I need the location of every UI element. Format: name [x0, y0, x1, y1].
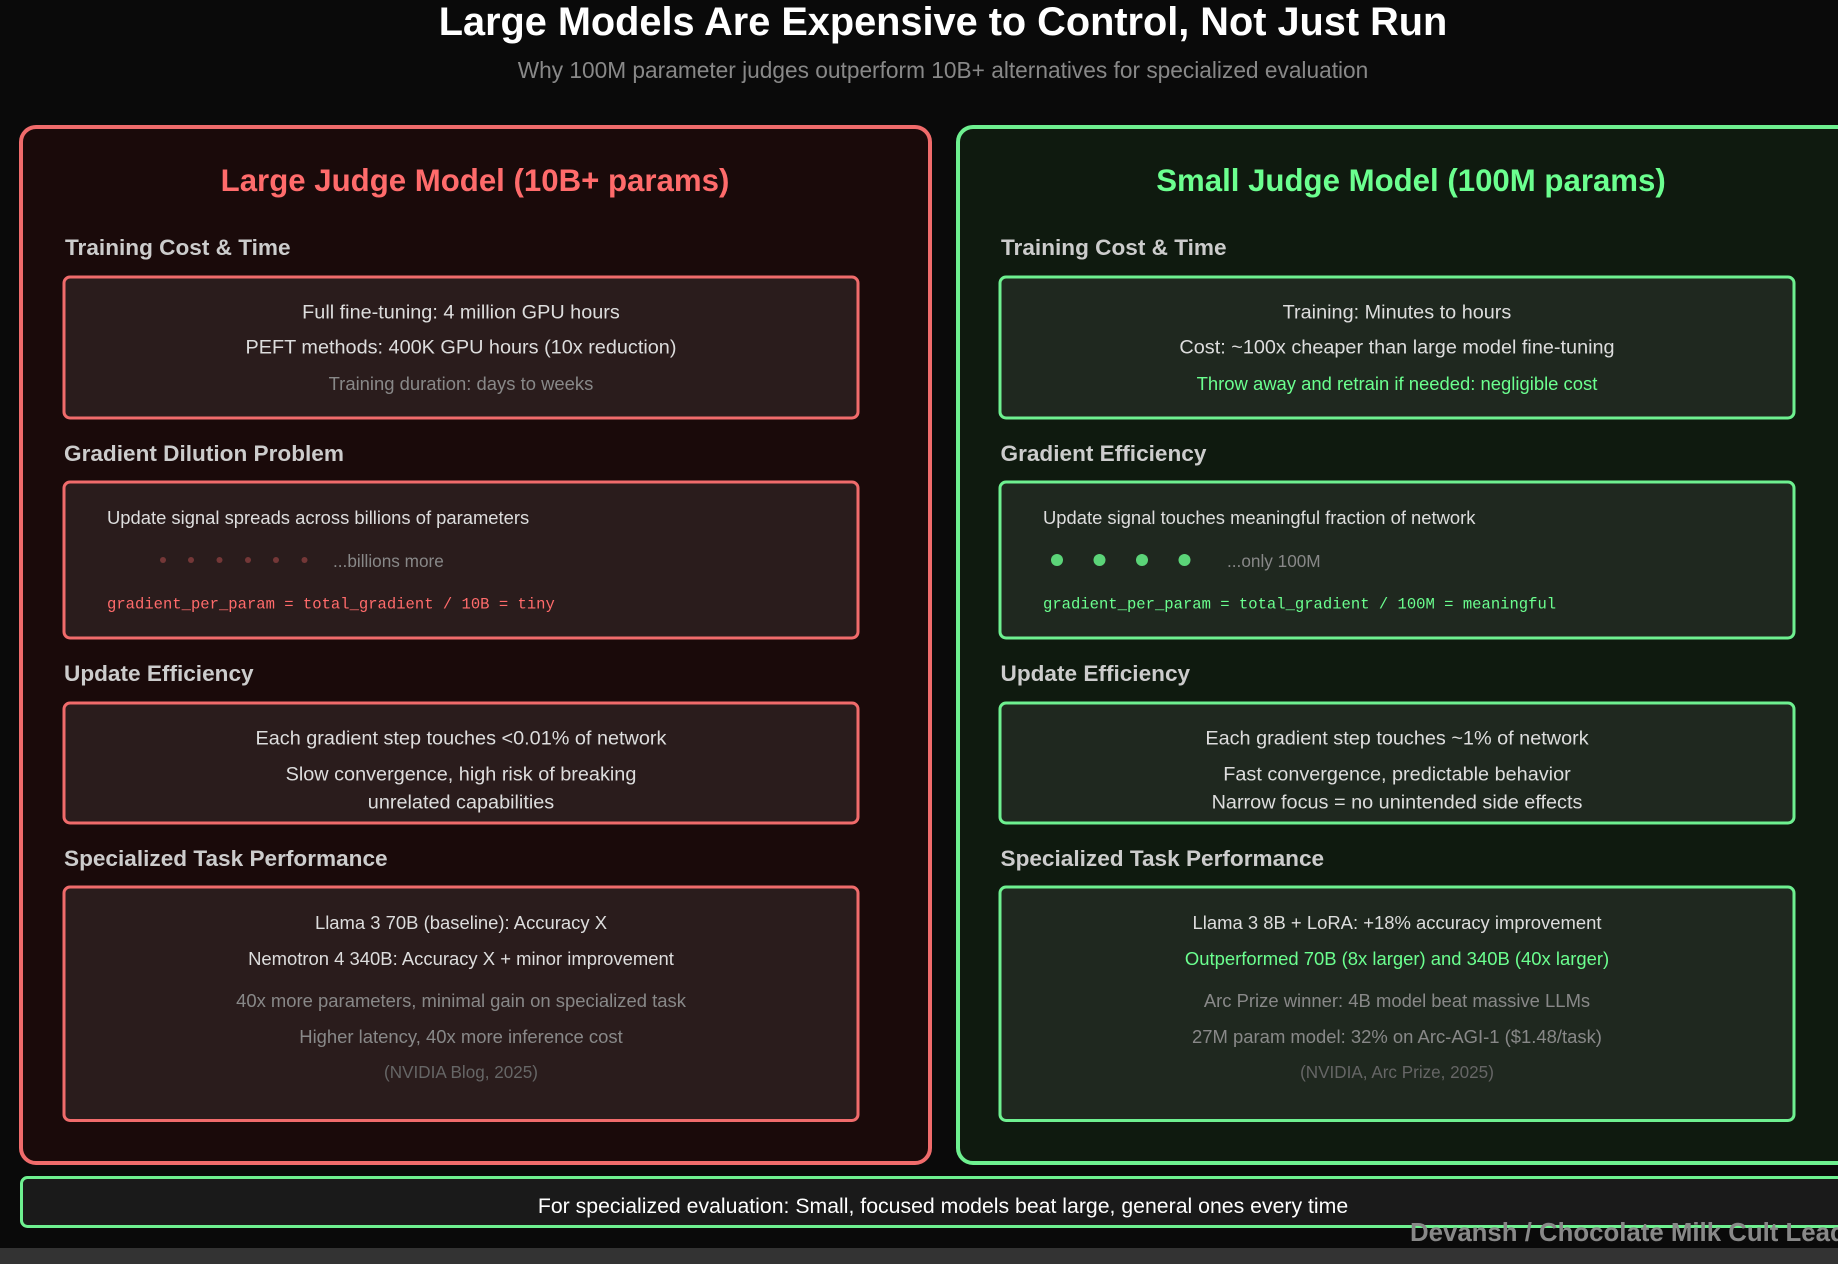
section: specialized task performance [1000, 846, 1794, 1120]
section: training cost and time: Cost: ~100x cheaper than large model fine-tuning [1179, 336, 1615, 358]
section: update efficiency [1000, 661, 1794, 823]
section: gradient dilution problem [64, 441, 858, 638]
section: training cost and time: Full fine-tuning: 4 million GPU hours [302, 302, 620, 324]
section: training cost and time: Training Cost & Time [65, 235, 291, 260]
section: update efficiency: Update Efficiency [1000, 661, 1191, 686]
section: specialized task performance: (NVIDIA Blog, 2025) [384, 1063, 538, 1082]
section: update efficiency: Narrow focus = no unintended side effects [1212, 792, 1582, 814]
section: training cost and time: Training duration: days to weeks [329, 373, 593, 394]
section: specialized task performance: 40x more parameters, minimal gain on specialized task [236, 990, 687, 1011]
section: update efficiency: Each gradient step touches ~1% of network [1205, 728, 1589, 750]
section: update efficiency: unrelated capabilities [368, 792, 554, 814]
section: specialized task performance: Specialized Task Performance [1000, 846, 1324, 871]
section: update efficiency: Each gradient step touches <0.01% of network [256, 728, 667, 750]
section: training cost and time [64, 235, 858, 418]
panel: small judge model [958, 127, 1838, 1163]
section: specialized task performance: Nemotron 4 340B: Accuracy X + minor improvement [248, 948, 674, 969]
section: specialized task performance: Arc Prize winner: 4B model beat massive LLMs [1204, 990, 1590, 1011]
subtitle: Why 100M parameter judges outperform 10B+ alternatives for specialized evaluation [518, 57, 1368, 83]
icon: dense parameter dots [1051, 554, 1190, 566]
section: specialized task performance: Llama 3 70B (baseline): Accuracy X [315, 912, 607, 933]
section: gradient efficiency: ...only 100M [1227, 551, 1321, 571]
section: gradient dilution problem: Gradient Dilution Problem [64, 441, 344, 466]
section: gradient efficiency [1000, 441, 1794, 638]
footer callout: For specialized evaluation: Small, focused models beat large, general ones every time [538, 1194, 1348, 1218]
section: training cost and time: PEFT methods: 400K GPU hours (10x reduction) [246, 336, 676, 358]
section: gradient dilution problem: Update signal spreads across billions of parameters [107, 507, 529, 528]
panel heading: large judge model: Large Judge Model (10B+ params) [221, 163, 729, 198]
section: training cost and time: Training: Minutes to hours [1283, 302, 1511, 324]
section: update efficiency: Slow convergence, high risk of breaking [286, 764, 636, 786]
section: specialized task performance: Higher latency, 40x more inference cost [299, 1026, 623, 1047]
section: update efficiency: Fast convergence, predictable behavior [1223, 764, 1571, 786]
panel: large judge model [21, 127, 930, 1163]
footer callout [22, 1178, 1838, 1226]
icon: sparse parameter dots [160, 557, 308, 563]
section: specialized task performance: 27M param model: 32% on Arc-AGI-1 ($1.48/task) [1192, 1026, 1602, 1047]
section: gradient efficiency: Gradient Efficiency [1000, 441, 1207, 466]
section: training cost and time: Training Cost & Time [1001, 235, 1227, 260]
section: specialized task performance: Outperformed 70B (8x larger) and 340B (40x larger) [1185, 948, 1609, 969]
panel heading: small judge model: Small Judge Model (100M params) [1156, 163, 1666, 198]
section: update efficiency: Update Efficiency [64, 661, 254, 686]
section: gradient dilution problem: gradient_per_param = total_gradient / 10B = tiny [107, 596, 555, 614]
section: gradient dilution problem: ...billions more [333, 551, 444, 571]
section: specialized task performance: Llama 3 8B + LoRA: +18% accuracy improvement [1193, 912, 1601, 933]
section: gradient efficiency: Update signal touches meaningful fraction of network [1043, 507, 1476, 528]
section: specialized task performance [64, 846, 858, 1120]
section: training cost and time: Throw away and retrain if needed: negligible cost [1197, 373, 1597, 394]
section: update efficiency [64, 661, 858, 823]
title: Large Models Are Expensive to Control, Not Just Run [439, 0, 1447, 44]
section: gradient efficiency: gradient_per_param = total_gradient / 100M = meaningful [1043, 596, 1556, 614]
section: training cost and time [1000, 235, 1794, 418]
section: specialized task performance: (NVIDIA, Arc Prize, 2025) [1300, 1063, 1494, 1082]
section: specialized task performance: Specialized Task Performance [64, 846, 388, 871]
